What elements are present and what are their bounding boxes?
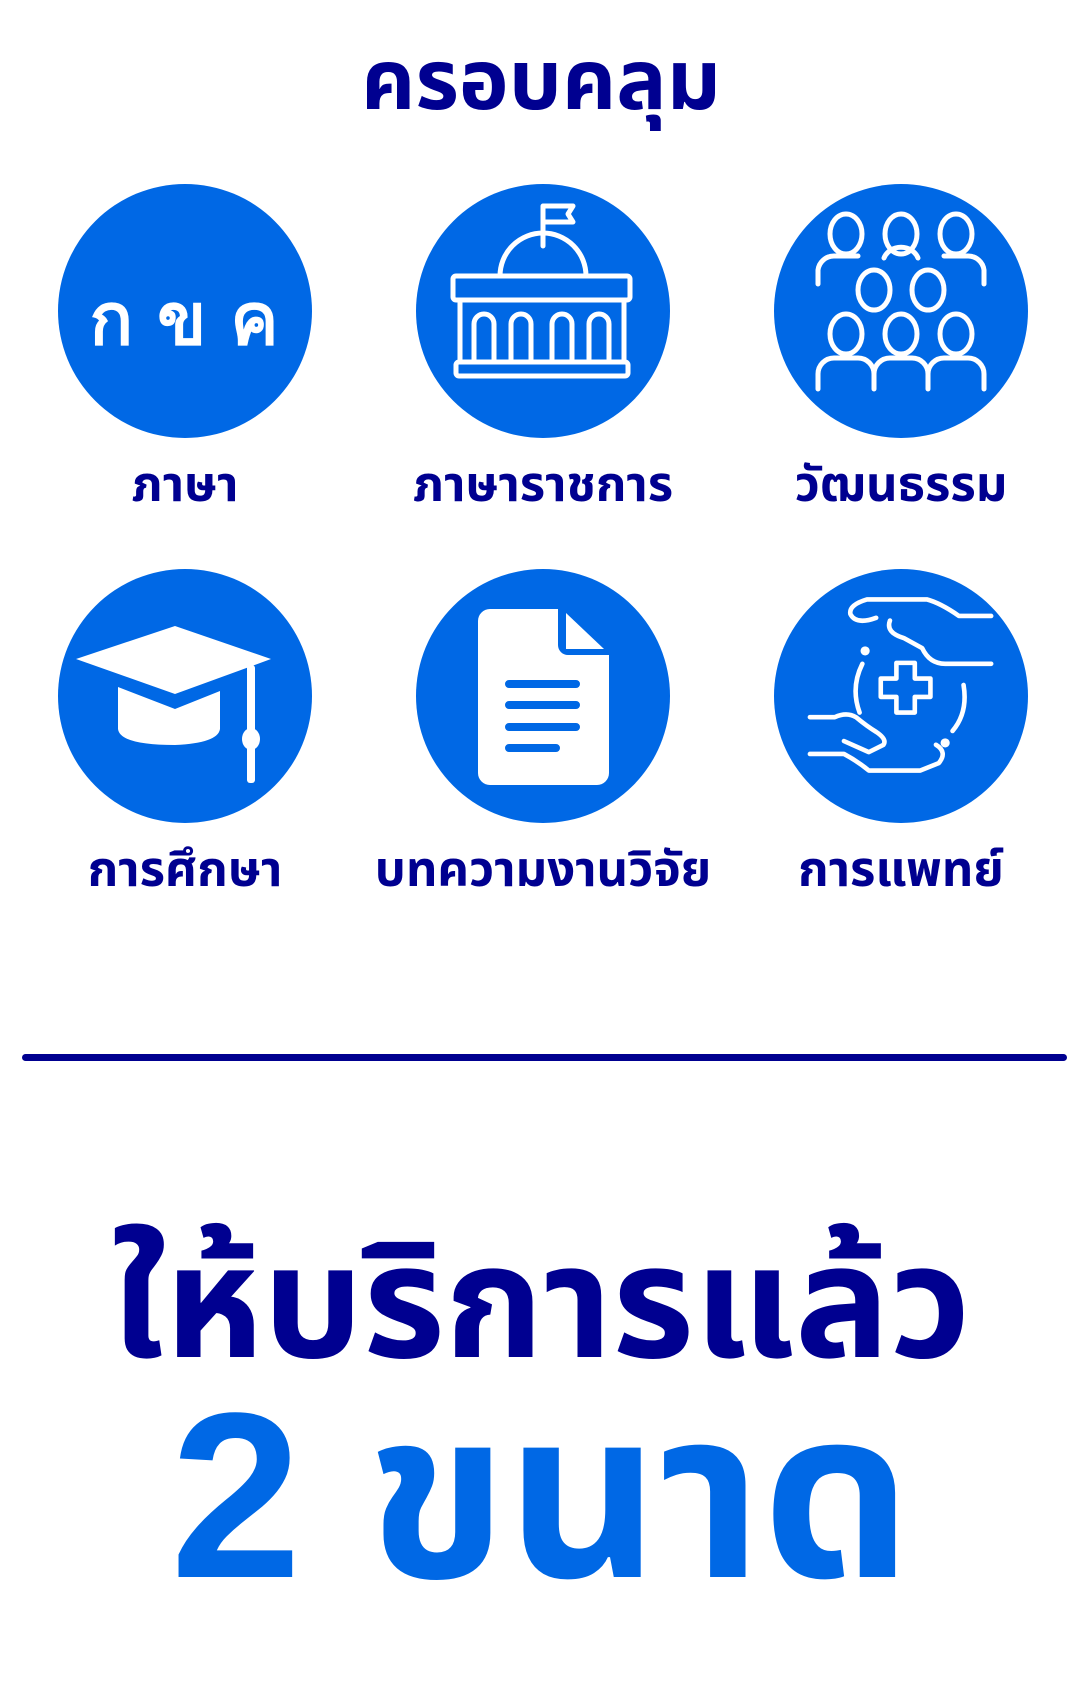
label: medical: การแพทย์ [798,843,1004,897]
headline: 2 sizes: 2 ขนาด [170,1364,912,1628]
icon: thai letters: ก ข ค [90,280,280,360]
icon: building [453,206,630,376]
title: ครอบคลุม [361,33,721,127]
label: language: ภาษา [132,458,238,512]
icon: hands with cross [810,599,991,771]
icon: people [818,214,984,389]
panel: medical [774,569,1028,823]
panel: official language [416,184,670,438]
divider [22,1054,1067,1061]
label: official language: ภาษาราชการ [413,458,673,512]
headline: service: ให้บริการแล้ว [111,1215,971,1391]
icon: graduation cap [76,626,271,783]
label: culture: วัฒนธรรม [795,458,1007,512]
icon: document [478,609,609,785]
panel: language [58,184,312,438]
panel: research article [416,569,670,823]
label: education: การศึกษา [88,843,282,897]
panel: culture [774,184,1028,438]
label: research article: บทความงานวิจัย [375,843,711,897]
panel: education [58,569,312,823]
